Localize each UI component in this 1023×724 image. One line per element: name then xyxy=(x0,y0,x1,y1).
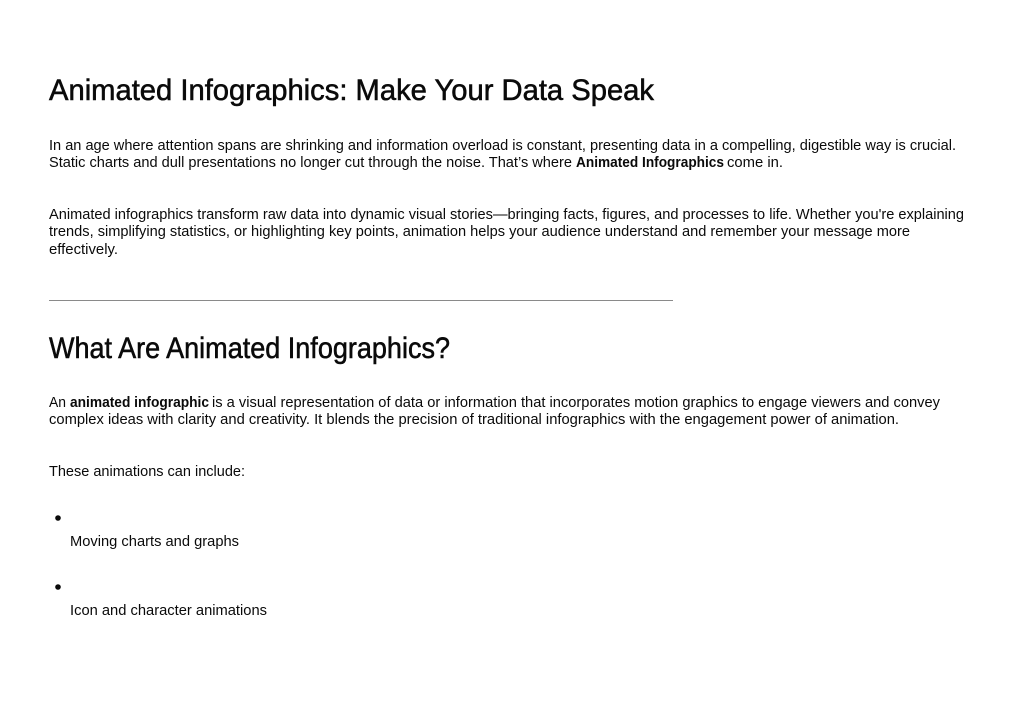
text block: intro paragraph: come in. xyxy=(727,155,783,171)
list item: icon and character animations: Icon and character animations xyxy=(70,603,267,619)
text block: definition paragraph: An xyxy=(49,395,66,411)
text block: intro paragraph: In an age where attention spans are shrinking and information overload is constant, presenting data in a compelling, digestible way is crucial. xyxy=(49,138,956,154)
list item: moving charts and graphs: Moving charts and graphs xyxy=(70,534,239,550)
text block: definition paragraph: is a visual representation of data or information that incorporates motion graphics to engage viewers and convey xyxy=(212,395,941,411)
list item: moving charts and graphs xyxy=(55,515,239,550)
text block: second paragraph: trends, simplifying statistics, or highlighting key points, animation helps your audience understand and remember your message more xyxy=(49,224,910,240)
text block: intro paragraph: Static charts and dull presentations no longer cut through the noise. That’s where xyxy=(49,155,572,171)
title: Animated Infographics: Make Your Data Speak xyxy=(49,74,655,107)
text block: intro paragraph: Animated Infographics xyxy=(576,155,724,171)
text block: second paragraph: effectively. xyxy=(49,242,118,258)
text block: definition paragraph: complex ideas with clarity and creativity. It blends the precision of traditional infographics with the engagement power of animation. xyxy=(49,412,899,428)
text block: second paragraph: Animated infographics transform raw data into dynamic visual stories—bringing facts, figures, and processes to life. Whether you're explaining xyxy=(49,207,964,223)
list item: icon and character animations xyxy=(55,584,267,619)
text block: list intro: These animations can include: xyxy=(49,464,245,480)
heading: What Are Animated Infographics?: What Are Animated Infographics? xyxy=(49,332,450,365)
text block: definition paragraph xyxy=(49,395,941,428)
text block: second paragraph xyxy=(49,207,964,258)
text block: intro paragraph xyxy=(49,138,956,171)
text block: definition paragraph: animated infographic xyxy=(70,395,209,411)
